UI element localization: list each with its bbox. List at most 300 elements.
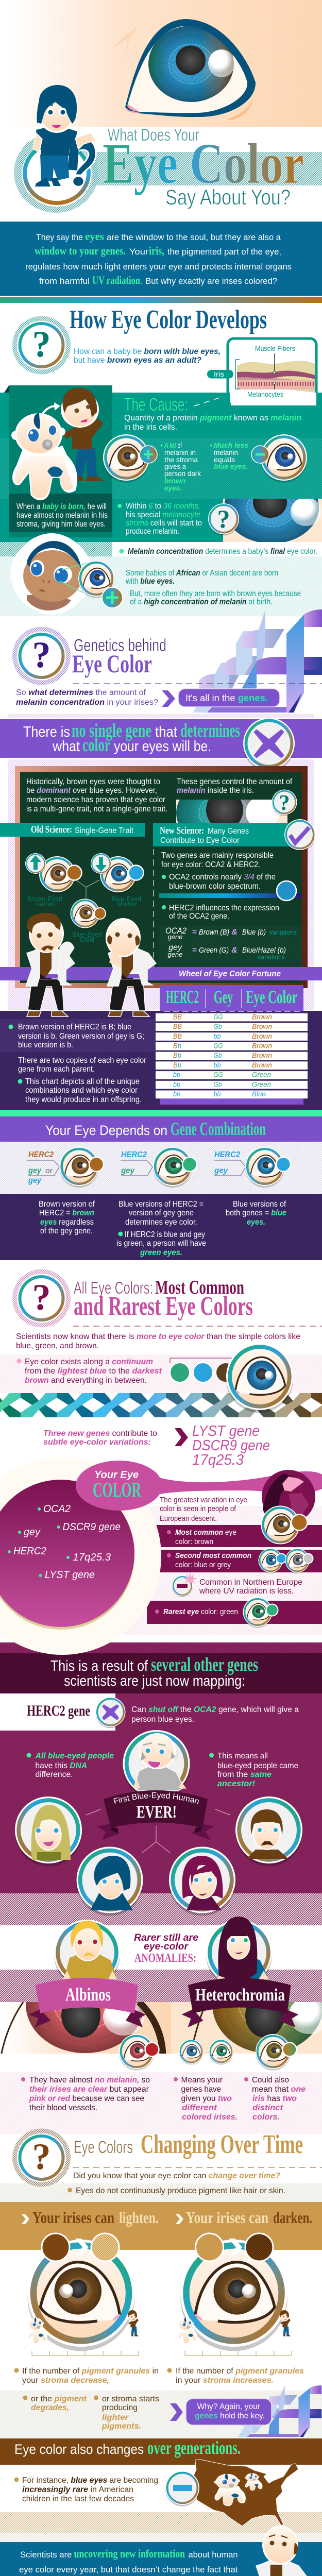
text: same ancestor (209, 1752, 298, 1788)
text: blue versions: green eyes. (140, 1248, 182, 1257)
callout: your eye color bubble (76, 1461, 322, 1511)
text: some babies: Some babies of African or Asian decent are born (126, 569, 278, 578)
label: herc2 gene (0, 1693, 115, 1731)
intro text: iris, (149, 244, 164, 257)
text: scientists uncovering: about human (189, 2550, 238, 2560)
eye: green heterochromia (209, 2039, 233, 2064)
text: brown version: HERC2 = brown (39, 1209, 94, 1217)
text: increasingly rare: children in the last few decades (22, 2495, 134, 2503)
table rows: bb (213, 1090, 221, 1098)
band: irises can lighten or darken: Your irises can (186, 2208, 268, 2227)
text: gene variations: = (192, 928, 197, 937)
text: could also: distinct (252, 2104, 283, 2112)
portrait: albino (54, 1920, 120, 1988)
icon: globe (262, 1470, 315, 1523)
table rows: Bb (173, 1061, 181, 1069)
text: when a baby is born (16, 502, 108, 529)
badge: question: ? (217, 504, 230, 533)
text: herc2 influences (162, 904, 279, 921)
banner: first blue-eyed human ever: EVER! (137, 1803, 177, 1822)
table header: HERC2 (166, 987, 199, 1007)
intro text: regulates how much light enters your eye and protects internal organs (25, 262, 292, 272)
text: gene variations: gene (168, 933, 182, 941)
panel: how eye color develops (0, 305, 322, 616)
banner: heterochromia (181, 1978, 299, 2027)
text: a lot of melanin: gives a (164, 462, 186, 470)
table rows: Gb (213, 1052, 222, 1059)
text: both genes: eyes. (247, 1218, 265, 1227)
eye: two-tone heterochromia (256, 2034, 297, 2071)
text: scientists uncovering: eye color every year, but that doesn’t change the fact that (19, 2565, 238, 2574)
eye: child: Child (80, 936, 94, 943)
text: second most common (167, 1551, 251, 1569)
text: scientists uncovering: uncovering new information (74, 2547, 185, 2560)
eye: most common brown (261, 1505, 307, 1546)
text: genes control melanin (177, 777, 293, 795)
text: the cause: in the iris cells. (124, 423, 177, 432)
teal section background (0, 393, 322, 542)
close-up: two-tone iris (171, 2002, 322, 2054)
text: much less melanin (210, 441, 248, 470)
text: most common: color: brown (175, 1537, 213, 1546)
panel: header (0, 0, 322, 222)
text: means your genes: Means your (181, 2076, 223, 2084)
text: a lot of melanin (160, 441, 201, 492)
text: the cause: The Cause: (124, 395, 188, 415)
illustration: child and baby (11, 388, 104, 499)
text: historically: Historically, brown eyes were thought to (26, 777, 160, 786)
panel: wheel of eye color fortune (0, 913, 322, 1110)
text: rarer still (134, 1933, 198, 1965)
text: rarer still: ANOMALIES: (134, 1952, 196, 1965)
heading: most common and rarest eye colors: All Eye Colors: (74, 1278, 153, 1297)
text: herc2 versions: There are two copies of each eye color (18, 1056, 147, 1065)
illustration: scientist right (106, 918, 156, 1016)
text: brown version (39, 1200, 95, 1235)
text: gene variations (165, 926, 297, 961)
text: historically (26, 777, 167, 814)
text: means your genes: given you two (181, 2094, 232, 2103)
badge: minus (165, 2471, 199, 2506)
panel: how eye color develops: but have brown eyes as an adult? (74, 356, 202, 365)
eye: albino (119, 2034, 159, 2071)
combination: blue: gey (214, 1166, 228, 1175)
text: could also: mean that one (252, 2085, 306, 2094)
table rows: bb (173, 1071, 180, 1079)
text: two genes: for eye color: OCA2 & HERC2. (161, 860, 260, 869)
text: brown version: eyes regardless (40, 1218, 94, 1227)
text: albinos: They have almost no melanin, so (29, 2076, 150, 2084)
heading: no single gene: no single gene (72, 720, 151, 741)
heading: how eye color develops: ? (32, 324, 50, 365)
intro text: are the window to the soul, but they are also a (107, 233, 281, 242)
text: blue versions: is green, a person will have (116, 1239, 206, 1248)
eye: child: Blue-Eyed (72, 931, 102, 938)
text: blue versions: Blue versions of HERC2 = (118, 1200, 204, 1209)
panel: first blue-eyed human (0, 1654, 302, 1916)
eye: rarest green (243, 1597, 278, 1628)
diagram: eye color circle (0, 1457, 161, 1655)
band: old science: Old Science: (31, 824, 72, 835)
table rows: bb (173, 1080, 180, 1088)
text: pigment granules increase (167, 2367, 304, 2385)
text: same ancestor: This means all (217, 1752, 268, 1760)
text: second most common: Second most common (175, 1551, 251, 1560)
text: albinos (21, 2076, 150, 2112)
combination: green: gey (121, 1166, 135, 1175)
callout: genes hold the key: Why? Again, your (197, 2402, 261, 2411)
intro text: Your (129, 247, 149, 257)
text: herc2 versions: blue version is b. (18, 1041, 73, 1049)
text: shut off oca2: Can shut off the OCA2 gene, which will give a (131, 1705, 299, 1714)
text: herc2 versions (8, 1023, 147, 1104)
heading: changing over time: ? (32, 2136, 50, 2177)
table rows: BB (173, 1032, 182, 1040)
illustration: purple DNA ribbon (193, 609, 322, 713)
band: new science: New Science: (160, 825, 204, 836)
panel: genetics behind eye color (8, 609, 322, 718)
heading: genetics behind eye color: ? (32, 634, 50, 675)
text: some babies: of a high concentration of melanin at birth. (130, 598, 273, 606)
text: all blue-eyed people: All blue-eyed people (35, 1752, 114, 1760)
list: new genes: LYST gene (192, 1423, 260, 1439)
text: continuum: Eye color exists along a continuum (25, 1358, 153, 1366)
callout: genes hold the key (186, 2399, 272, 2425)
intro text: They say the (36, 233, 83, 242)
text: within 6 to 36 months: produce melanin. (126, 527, 179, 536)
heading: no single gene: There is (23, 724, 70, 740)
title: Say About You? (165, 185, 291, 209)
eye: blue-eyed mother: Blue-Eyed (111, 895, 141, 903)
text: gene variations: = (192, 946, 197, 955)
table rows (156, 1013, 308, 1098)
badge: less uv (172, 1572, 197, 1597)
panel: over generations (0, 2437, 322, 2542)
portrait: boy (76, 1846, 143, 1916)
text: within 6 to 36 months: Within 6 to 36 months, (126, 502, 200, 511)
text: within 6 to 36 months: his special melanocyte (126, 511, 200, 519)
text: gene variations: variations (269, 928, 297, 936)
callout: your eye color bubble: Your Eye (94, 1469, 139, 1481)
swatches: eye color continuum (170, 1358, 236, 1382)
text: increasingly rare: increasingly rare in American (22, 2485, 133, 2494)
hatch: bullet strip (0, 2183, 322, 2202)
band: new science: Contribute to Eye Color (160, 836, 240, 845)
heading: most common and rarest eye colors (14, 1272, 253, 1325)
table rows: Gb (213, 1023, 222, 1030)
text: means your genes: colored irises. (182, 2113, 238, 2122)
label: gene list: LYST gene (45, 1569, 95, 1581)
text: much less melanin: equals (214, 455, 235, 464)
illustration: scientist left (26, 913, 75, 1016)
text: a lot of melanin: A lot of (164, 441, 182, 449)
label: gene list: 17q25.3 (73, 1552, 111, 1563)
illustration: small DNA ribbon (238, 2385, 321, 2437)
heading: no single gene: your eyes will be. (114, 738, 211, 755)
table rows: Brown (252, 1013, 272, 1021)
intro text: eyes (85, 230, 104, 243)
text: scientists now know: Scientists now know that there is more to eye color than the simple colors like (16, 1332, 300, 1341)
text: or stroma starts: pigments. (101, 2422, 141, 2431)
heading: several other genes: several other genes (151, 1654, 258, 1675)
table header (164, 987, 301, 1011)
text: two genes: OCA2 controls nearly 3/4 of the (169, 873, 276, 882)
text: a lot of melanin: eyes. (164, 484, 182, 492)
table rows: Brown (252, 1042, 272, 1050)
text: greatest variation: color is seen in people of (160, 1504, 236, 1513)
text: continuum: brown and everything in between. (25, 1376, 147, 1385)
text: a lot of melanin: • (160, 441, 163, 449)
eye: blue-eyed mother (91, 853, 143, 908)
band: irises can lighten or darken: lighten. (119, 2208, 159, 2227)
band: irises can lighten or darken: Your irises can (32, 2208, 114, 2227)
text: brown version: of the gey gene. (40, 1227, 93, 1235)
combination: brown: or (45, 1166, 53, 1175)
text: historically: be dominant over blue eyes. However, (26, 786, 157, 795)
combination: brown (27, 1147, 104, 1188)
heading: genetics behind eye color (14, 629, 166, 683)
text: genes control melanin: melanin inside the iris. (177, 786, 254, 795)
combination: brown: gey (28, 1166, 42, 1175)
table rows: bb (213, 1032, 221, 1040)
tag: iris: Iris (214, 370, 224, 378)
intro text: window to your genes. (35, 244, 126, 257)
heading: changing over time (14, 2130, 303, 2184)
list: new genes: DSCR9 gene (192, 1437, 270, 1454)
text: blue versions: version of gey gene (129, 1209, 194, 1217)
text: a lot of melanin: the stroma (164, 455, 198, 464)
text: or the pigment degrades: or the pigment (31, 2395, 87, 2403)
band: old science: Single-Gene Trait (75, 826, 134, 835)
band: irises can lighten or darken (0, 2202, 322, 2250)
text: within 6 to 36 months: stroma cells will start to (126, 519, 202, 528)
text: some babies: But, more often they are born with brown eyes because (130, 589, 301, 598)
arrow: chevron (162, 690, 175, 707)
panel: intro (0, 222, 322, 296)
text: rarer still: Rarer still are (134, 1933, 198, 1943)
text: both genes: both genes = blue (226, 1209, 286, 1217)
portrait: first blue-eyed human (123, 1730, 190, 1800)
map: United States (193, 2460, 298, 2526)
panel: anomalies (0, 1917, 322, 2134)
text: albinos: their irises are clear but appear (29, 2085, 149, 2094)
text: shut off oca2 (131, 1705, 299, 1724)
table rows: Brown (252, 1052, 272, 1059)
text: two genes (161, 851, 276, 891)
diagram: iris cross-section: Melanocytes (247, 390, 283, 398)
text: or stroma starts: producing (102, 2403, 138, 2412)
text: gene variations: variations (258, 953, 285, 961)
text: herc2 versions: gene from each parent. (18, 1065, 95, 1074)
badge: question (208, 503, 239, 535)
text: gene variations: Blue/Hazel (b) (242, 946, 286, 955)
callout: in the genes (178, 689, 280, 707)
text: rarer still: eye-color (144, 1941, 189, 1952)
text: when a baby is born: When a baby is born, he will (16, 502, 107, 511)
close-up: blue iris (225, 499, 321, 542)
hatched title band (93, 152, 322, 185)
heading: your eye depends on gene combination: Your Eye Depends on (45, 1123, 167, 1138)
heading: no single gene: color (82, 735, 110, 756)
badge: question: ? (279, 791, 290, 815)
background: magenta section (0, 1642, 322, 1925)
text: most common (167, 1528, 236, 1546)
text: same ancestor: from the same (217, 1770, 272, 1779)
text: shut off oca2: person blue eyes. (131, 1715, 194, 1724)
eye: blue and grey (259, 1549, 313, 1573)
portrait: heterochromia (206, 1917, 272, 1988)
portrait: girl (169, 1846, 235, 1916)
text: both genes (226, 1200, 286, 1227)
heading: your eye depends on gene combination: Gene Combination (171, 1118, 266, 1139)
close-up: iris strip (176, 800, 287, 823)
label: gene list: gey (24, 1527, 41, 1538)
text: much less melanin: melanin (214, 448, 238, 456)
DNA band (0, 1393, 322, 1417)
text: greatest variation: The greatest variation in eye (160, 1496, 247, 1504)
badge: cross (96, 1697, 126, 1728)
text: means your genes: different (182, 2104, 217, 2112)
text: pigment granules decrease: your stroma decrease, (22, 2376, 109, 2385)
text: herc2 influences: of the OCA2 gene. (169, 912, 229, 921)
text: when a baby is born: have almost no melanin in his (16, 511, 108, 520)
eye: brown-eyed father: Brown-Eyed (27, 895, 62, 903)
text: within 6 to 36 months (117, 502, 202, 536)
text: historically: is a multi-gene trait, not a single-gene trait. (26, 805, 167, 814)
text: or stroma starts: lighter (102, 2413, 129, 2422)
text: herc2 influences: HERC2 influences the expression (169, 904, 279, 912)
band: gene combination explanations (0, 1194, 322, 1260)
text: continuum: from the lightest blue to the darkest (25, 1367, 162, 1376)
intro text: UV radiation (92, 274, 140, 286)
text: or the pigment degrades: degrades, (31, 2403, 69, 2412)
heading: most common and rarest eye colors: ? (32, 1277, 50, 1318)
text: gene variations: Blue (b) (242, 928, 266, 937)
text: gene variations: & (231, 928, 238, 937)
text: much less melanin: blue eyes. (214, 462, 248, 470)
combination: blue (214, 1147, 291, 1188)
diagram: iris cross-section (207, 338, 316, 408)
text: two genes: Two genes are mainly responsible (161, 851, 274, 860)
panel: conclusion (0, 2526, 322, 2576)
character: boy leaning on question mark (33, 85, 96, 187)
eye: lightening (28, 2233, 135, 2351)
text: when a baby is born: stroma, giving him blue eyes. (16, 520, 106, 529)
heading: genetics behind eye color: Eye Color (72, 649, 152, 678)
label: gene list (8, 1503, 121, 1581)
text: pigment granules decrease: If the number of pigment granules in (22, 2367, 159, 2376)
band: new science (153, 823, 296, 846)
illustration: baby and child, darken (178, 2310, 291, 2344)
text: albinos: pink or red because we can see (29, 2094, 144, 2103)
heading: over generations: Eye color also changes (14, 2442, 144, 2457)
text: herc2 versions: they would produce in an offspring. (25, 1095, 142, 1104)
intro text: . But why exactly are irises colored? (141, 277, 277, 286)
text: what determines: So what determines the amount of (16, 688, 146, 697)
banner: first blue-eyed human ever: First Blue-Eyed Human (113, 1792, 199, 1804)
text: pigment granules decrease (14, 2367, 159, 2385)
text: same ancestor: ancestor! (217, 1780, 256, 1788)
heading: no single gene (23, 720, 240, 756)
text: melanin concentration: Melanin concentration determines a baby's final eye color. (128, 547, 317, 556)
label: gene list: OCA2 (43, 1503, 71, 1515)
text: greatest variation: European descent. (160, 1514, 217, 1523)
text: change over time: Did you know that your eye color can change over time? (73, 2172, 280, 2180)
text: albinos: their blood vessels. (29, 2104, 97, 2112)
illustration: babies on map (214, 2473, 262, 2505)
banner: albinos (29, 1978, 146, 2027)
close-up: red iris (1, 2002, 171, 2054)
heading: genetics behind eye color: Genetics behind (74, 636, 166, 655)
list: new genes (192, 1423, 270, 1468)
text: what determines (16, 688, 158, 707)
text: gene variations: & (231, 946, 238, 955)
combination: green (121, 1147, 197, 1188)
table rows: Gb (213, 1080, 222, 1088)
table rows: bb (213, 1061, 221, 1069)
text: scientists now know: blue, green, and brown. (16, 1342, 99, 1350)
badge: cross (243, 718, 295, 771)
text: gene variations: OCA2 (165, 926, 187, 936)
question text: How can a baby be born with blue eyes, (74, 347, 221, 356)
text: gene variations: gene (168, 951, 182, 958)
comparison: high melanin eye (103, 434, 157, 483)
eye: brown-eyed father (25, 853, 81, 908)
text: continuum (16, 1358, 162, 1385)
spectrum bar (159, 881, 302, 901)
text: historically: modern science has proven that eye color (26, 795, 166, 804)
table rows: BB (173, 1023, 182, 1030)
combination: green: HERC2 (121, 1150, 147, 1159)
illustration: baby and child, lighten (28, 2310, 139, 2344)
heading: over generations (14, 2437, 241, 2458)
table rows: GG (213, 1013, 223, 1021)
eye: brown-eyed father: Father (36, 901, 55, 908)
banner: heterochromia: Heterochromia (195, 1986, 285, 2005)
illustration: dark-skinned baby (10, 533, 123, 615)
text: could also: colors. (252, 2113, 280, 2122)
table rows: GG (213, 1071, 223, 1079)
heading: several other genes (50, 1654, 258, 1689)
panel: or the pigment (0, 2385, 322, 2438)
text: three new genes (43, 1429, 157, 1447)
illustration: scientist conclusion (255, 2526, 307, 2576)
heading: several other genes: This is a result of (50, 1658, 148, 1674)
table rows: GG (213, 1042, 223, 1050)
table rows: Brown (252, 1061, 272, 1069)
intro text: the pigmented part of the eye, (167, 247, 281, 257)
text: rarest: Rarest eye color: green (163, 1607, 238, 1616)
text: eyes do not produce pigment: Eyes do not continuously produce pigment like hair or skin. (76, 2187, 285, 2195)
text: most common: Most common eye (175, 1528, 236, 1537)
panel: chalkboard (0, 766, 315, 988)
text: both genes: Blue versions of (233, 1200, 286, 1209)
table rows: BB (173, 1013, 182, 1021)
title: What Does Your (108, 125, 199, 144)
text: scientists uncovering (19, 2547, 238, 2576)
table rows: Green (252, 1080, 271, 1088)
text: increasingly rare: For instance, blue eyes are becoming (22, 2476, 158, 2485)
text: two genes: blue-brown color spectrum. (169, 882, 261, 891)
text: herc2 versions: combinations and which eye color (25, 1086, 138, 1095)
heading: no single gene: what (52, 738, 80, 755)
badge: question (272, 789, 297, 816)
text: pigment granules increase: in your stroma increases. (176, 2376, 274, 2385)
gradient divider (0, 297, 322, 303)
heading: no single gene: determines (180, 720, 240, 741)
text: some babies (125, 569, 301, 606)
panel: all eye colors (0, 1272, 322, 1468)
